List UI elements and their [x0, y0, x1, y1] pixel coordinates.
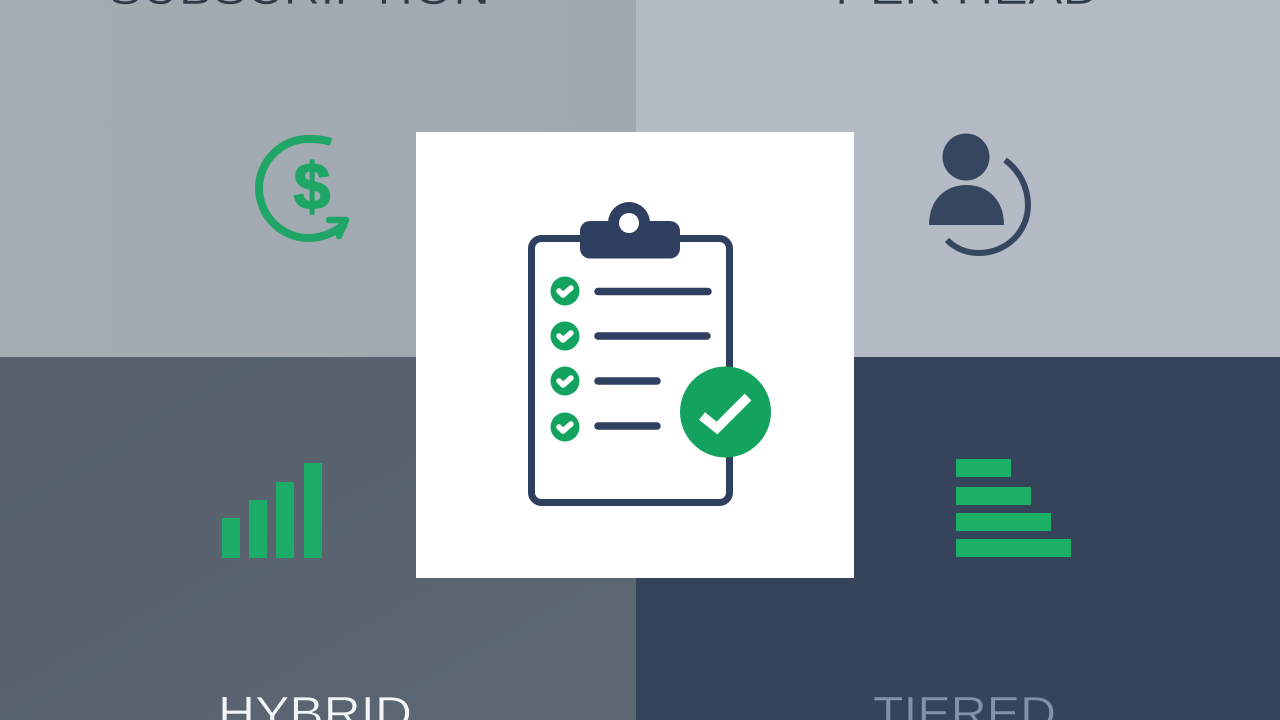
panel: subscription: [0, 0, 636, 357]
icon: clipboard: [532, 202, 730, 502]
icon: stepped bars: [956, 459, 1071, 557]
panel: tiered: [636, 357, 1280, 720]
icon: person with arc: [929, 134, 1028, 253]
icon: recurring dollar: [259, 139, 346, 238]
checklist rows: [550, 276, 708, 442]
icon: approval check badge: [680, 366, 771, 458]
icon: rising bars: [222, 463, 322, 558]
panel: per head: [636, 0, 1280, 357]
panel: hybrid: [0, 357, 636, 720]
icon: recurring dollar: $: [294, 149, 330, 223]
panel: center card: [416, 132, 854, 578]
